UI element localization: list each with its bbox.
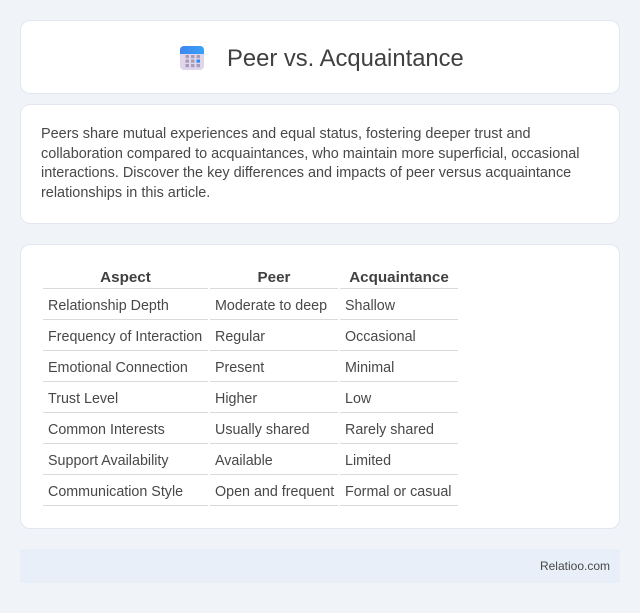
- panel: title card: [20, 20, 620, 94]
- row: Support Availability: Available: [215, 453, 273, 469]
- row: Frequency of Interaction: Occasional: [345, 329, 416, 345]
- row: Support Availability: Support Availability: [48, 453, 169, 469]
- footer bar: [20, 549, 620, 583]
- footer text: Relatioo.com: [540, 559, 610, 573]
- row: Emotional Connection: [43, 360, 458, 382]
- row: Frequency of Interaction: [43, 329, 458, 351]
- row: Common Interests: Common Interests: [48, 422, 165, 438]
- row: Emotional Connection: Emotional Connection: [48, 360, 188, 376]
- intro text: Peers share mutual experiences and equal status, fostering deeper trust and: [41, 126, 531, 142]
- row: Relationship Depth: Shallow: [345, 298, 395, 314]
- row: Support Availability: Limited: [345, 453, 391, 469]
- header row: Aspect: [100, 269, 151, 286]
- header row: Acquaintance: [349, 269, 449, 286]
- row: Communication Style: Formal or casual: [345, 484, 451, 500]
- row: Trust Level: Higher: [215, 391, 257, 407]
- row: Trust Level: [43, 391, 458, 413]
- intro text: interactions. Discover the key differences and impacts of peer versus acquaintance: [41, 165, 571, 181]
- row: Trust Level: Low: [345, 391, 371, 407]
- title: Peer vs. Acquaintance: [227, 45, 464, 72]
- row: Relationship Depth: Moderate to deep: [215, 298, 327, 314]
- row: Frequency of Interaction: Frequency of Interaction: [48, 329, 202, 345]
- panel: comparison table: [20, 244, 620, 529]
- row: Communication Style: Communication Style: [48, 484, 183, 500]
- row: Emotional Connection: Minimal: [345, 360, 394, 376]
- intro text: [41, 126, 580, 201]
- header row: Peer: [258, 269, 290, 286]
- row: Emotional Connection: Present: [215, 360, 264, 376]
- row: Trust Level: Trust Level: [48, 391, 118, 407]
- row: Common Interests: Rarely shared: [345, 422, 434, 438]
- row: Common Interests: [43, 422, 458, 444]
- icon: calendar: [180, 46, 204, 70]
- intro text: relationships in this article.: [41, 185, 210, 201]
- panel: introduction: [20, 104, 620, 224]
- row: Support Availability: [43, 453, 458, 475]
- row: Frequency of Interaction: Regular: [215, 329, 265, 345]
- header row: [43, 269, 458, 289]
- row: Communication Style: [43, 484, 458, 506]
- table: [43, 269, 458, 506]
- row: Communication Style: Open and frequent: [215, 484, 334, 500]
- row: Relationship Depth: Relationship Depth: [48, 298, 169, 314]
- row: Relationship Depth: [43, 298, 458, 320]
- row: Common Interests: Usually shared: [215, 422, 310, 438]
- intro text: collaboration compared to acquaintances, who maintain more superficial, occasional: [41, 146, 580, 162]
